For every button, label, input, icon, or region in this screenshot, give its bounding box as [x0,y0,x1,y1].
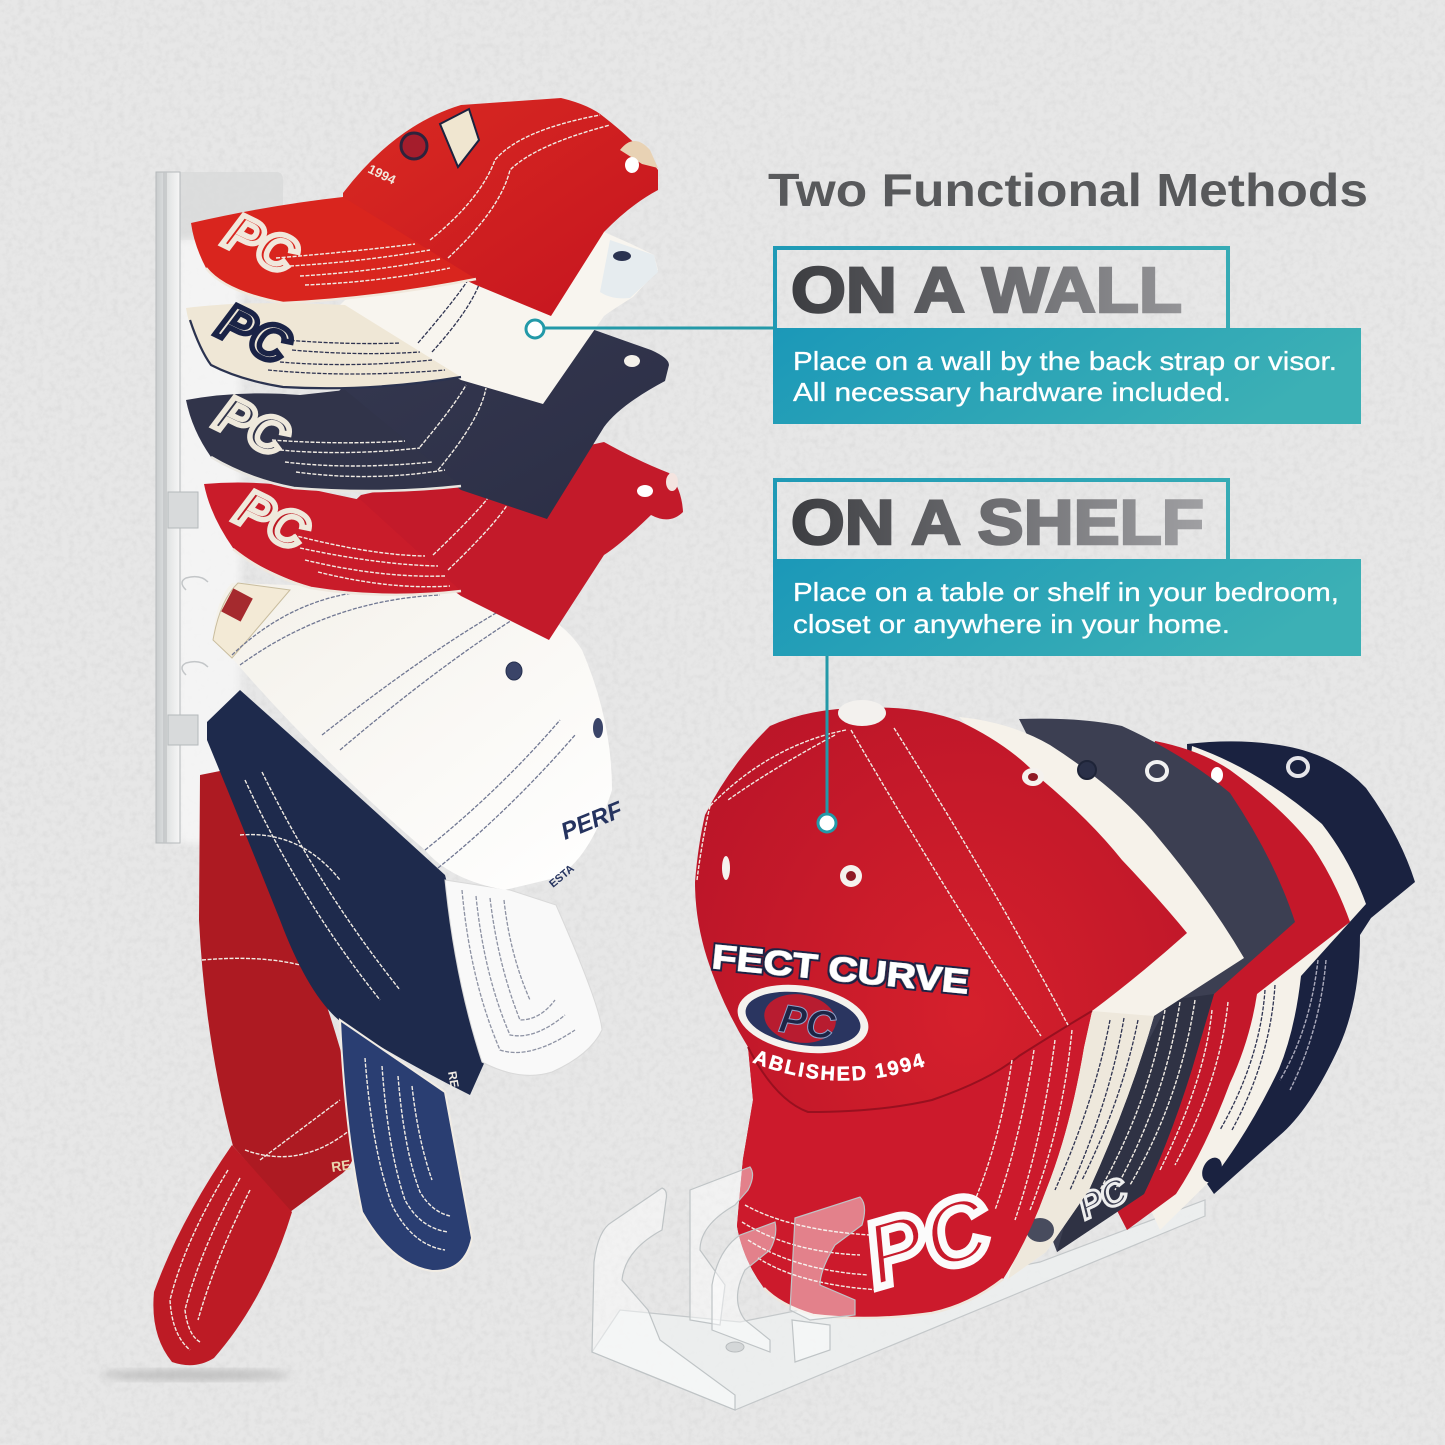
shelf display with stacked hats [591,700,1415,1411]
connector: wall callout [526,320,775,338]
floor shadow [100,1369,290,1381]
embroidered text: brand: FECT CURVE [710,938,971,1002]
icon: acrylic wall rack [156,172,283,843]
hat: red, hanging lowest: RE [330,1156,352,1175]
hat: navy, third [1000,719,1295,1252]
hat: navy, back [1150,741,1415,1194]
text block: wall description: Place on a wall by the back strap or visor. [793,346,1337,376]
heading: Two Functional Methods [768,164,1368,216]
button and eyelets [722,700,1044,887]
icon: acrylic shelf base [592,1200,1205,1410]
hat: cream, second [959,717,1244,1279]
text block: shelf description: closet or anywhere in your home. [793,609,1230,639]
text block: wall description [793,346,1337,407]
hat: red, top [191,98,658,316]
text block: shelf description [793,577,1339,639]
logo: PC on navy visor: PC [1071,1169,1135,1227]
connector: shelf callout [818,656,836,832]
hat: red, front [695,700,1187,1320]
icon: acrylic shelf brackets [592,1167,865,1410]
hat: white, hanging large [213,583,628,1075]
text block: wall description: All necessary hardware included. [793,377,1231,407]
heading: on a wall: ON A WALL [791,254,1182,326]
hat: navy, hanging [207,690,490,1271]
hat: red, fourth [204,442,683,640]
panel: on a wall [773,248,1361,424]
hat: white, hanging large: PERF [557,796,628,846]
hat: navy, third [186,327,669,519]
visor shading [737,1011,1092,1318]
text block: shelf description: Place on a table or shelf in your bedroom, [793,577,1339,607]
heading: on a shelf: ON A SHELF [791,488,1204,558]
hat: cream, fifth [1100,746,1366,1230]
logo: PC on visor: PC [853,1175,1002,1307]
hat: navy, hanging: RE [445,1070,462,1089]
hat: red, top: 1994 [366,161,399,188]
logo: PC embroidered: PC [227,479,318,563]
logo: PC embroidered: PC [216,203,307,287]
wall mounted hat rack with hats [100,98,683,1381]
logo: PC embroidered: PC [207,385,298,469]
logo: PC embroidered: PC [209,293,300,377]
hat: cream, second [186,232,658,404]
panel: on a shelf [773,480,1361,656]
logo: oval badge [733,976,873,1062]
hat: red, hanging lowest [153,770,360,1365]
hat: red, fourth [1060,741,1350,1230]
logo: oval badge: PC [776,997,839,1049]
embroidered text: established: ABLISHED 1994 [752,1050,925,1081]
hat: white, hanging large: ESTA [547,863,577,890]
